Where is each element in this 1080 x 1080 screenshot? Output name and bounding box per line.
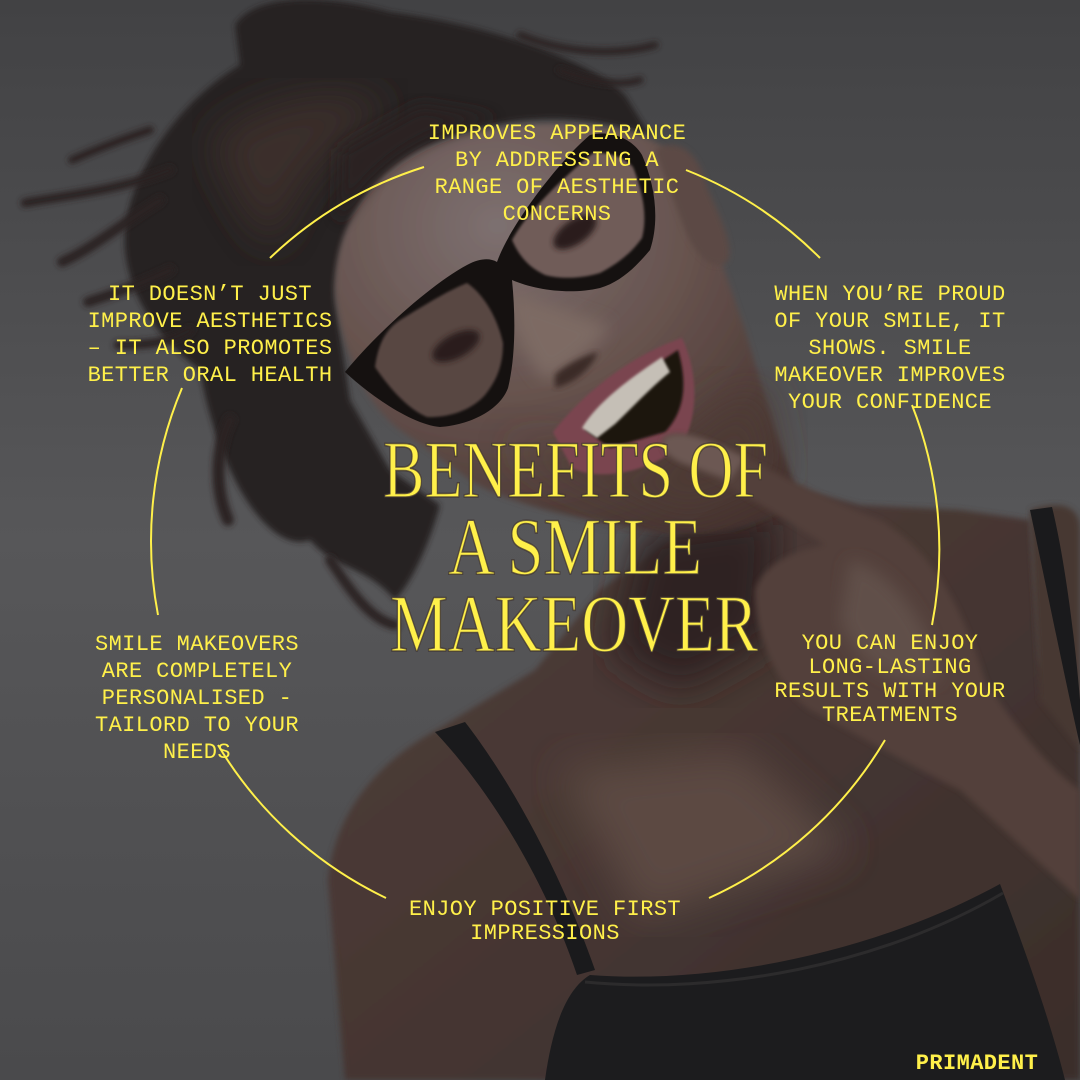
- text: improves appearance: RANGE OF AESTHETIC: [435, 175, 679, 200]
- text: confidence: MAKEOVER IMPROVES: [774, 363, 1006, 388]
- text: oral health: – IT ALSO PROMOTES: [88, 336, 332, 361]
- text: oral health: IMPROVE AESTHETICS: [88, 309, 332, 334]
- title: A SMILE: [448, 501, 702, 592]
- face: [335, 124, 800, 533]
- right strap: [1030, 507, 1080, 745]
- text: confidence: [774, 282, 1006, 415]
- text: confidence: YOUR CONFIDENCE: [788, 390, 992, 415]
- mouth: [553, 338, 694, 474]
- dark top: [545, 884, 1065, 1080]
- hair: [125, 0, 650, 600]
- text: personalised: [95, 632, 299, 765]
- text: long-lasting results: RESULTS WITH YOUR: [774, 679, 1006, 704]
- text: oral health: BETTER ORAL HEALTH: [88, 363, 332, 388]
- body and shoulders: [328, 480, 1080, 1080]
- text: confidence: OF YOUR SMILE, IT: [774, 309, 1006, 334]
- text: improves appearance: CONCERNS: [503, 202, 611, 227]
- text: long-lasting results: LONG-LASTING: [808, 655, 972, 680]
- text: confidence: SHOWS. SMILE: [808, 336, 972, 361]
- hair wisps: [25, 35, 655, 625]
- text: long-lasting results: YOU CAN ENJOY: [802, 631, 978, 656]
- text: confidence: WHEN YOU’RE PROUD: [774, 282, 1006, 307]
- text: oral health: IT DOESN’T JUST: [108, 282, 312, 307]
- text: long-lasting results: [774, 631, 1006, 728]
- cheek shadow: [500, 380, 780, 520]
- brand: Primadent: PRIMADENT: [916, 1051, 1038, 1076]
- left strap: [435, 722, 595, 975]
- text: personalised: ARE COMPLETELY: [102, 659, 292, 684]
- finger and hand: [663, 434, 1080, 900]
- text: long-lasting results: TREATMENTS: [822, 703, 958, 728]
- text: personalised: PERSONALISED -: [102, 686, 292, 711]
- text: improves appearance: BY ADDRESSING A: [455, 148, 659, 173]
- title: MAKEOVER: [390, 578, 758, 669]
- text: first impressions: [409, 897, 681, 946]
- right shoulder: [1030, 505, 1080, 750]
- ear: [655, 145, 729, 265]
- text: oral health: [88, 282, 332, 388]
- text: personalised: NEEDS: [163, 740, 231, 765]
- text: personalised: TAILORD TO YOUR: [95, 713, 299, 738]
- hairline shadow: [338, 105, 500, 225]
- text: improves appearance: [428, 121, 686, 227]
- eyes: [427, 208, 602, 369]
- text: first impressions: IMPRESSIONS: [470, 921, 620, 946]
- text: improves appearance: IMPROVES APPEARANCE: [428, 121, 686, 146]
- title: BENEFITS OF: [383, 424, 768, 515]
- text: personalised: SMILE MAKEOVERS: [95, 632, 299, 657]
- nose highlight: [505, 290, 610, 380]
- glasses: [345, 134, 655, 427]
- text: first impressions: ENJOY POSITIVE FIRST: [409, 897, 681, 922]
